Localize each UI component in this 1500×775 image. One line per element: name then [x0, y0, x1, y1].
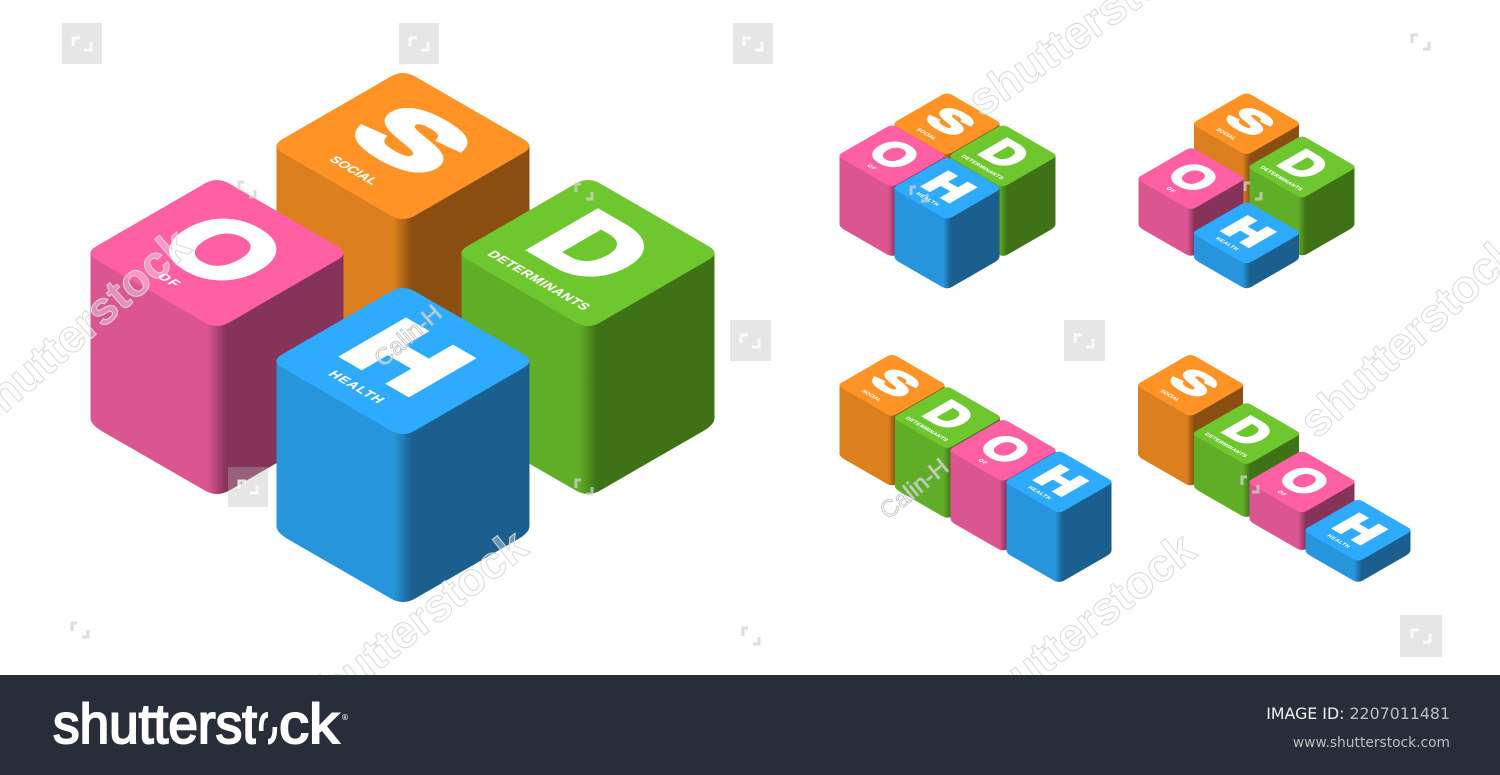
cube H: [895, 158, 999, 288]
cube O: O: [856, 132, 933, 176]
shutterstock logo wordmark: shutterst: [53, 692, 257, 755]
cube O: OF: [1164, 187, 1177, 194]
cube S: S: [1158, 362, 1230, 404]
large cube O: of: [90, 180, 344, 494]
large cube D: determinants: [462, 180, 714, 494]
cube D: DETERMINANTS: [1258, 166, 1304, 192]
image ID text: IMAGE ID: 2207011481: [1266, 704, 1450, 723]
cube H: H: [1024, 460, 1097, 502]
shutterstock logo wordmark: ck: [279, 692, 340, 755]
large cube H: health: [276, 288, 530, 602]
cube D: DETERMINANTS: [904, 416, 949, 443]
cube O: O: [967, 427, 1044, 471]
cube D: DETERMINANTS: [959, 154, 1005, 181]
cube S: S: [860, 362, 931, 404]
cube D: D: [913, 394, 987, 437]
large cube H: health: H: [320, 307, 495, 408]
shutterstock logo wordmark: o: [258, 692, 278, 755]
cube H: HEALTH: [1325, 534, 1351, 549]
cube S: [895, 93, 999, 224]
cube O: OF: [1275, 490, 1288, 497]
cube S: [1194, 93, 1299, 224]
cube O: OF: [976, 458, 989, 466]
cube H: H: [1212, 211, 1285, 253]
cube D: [895, 387, 1000, 518]
shutterstock logo wordmark: ®: [341, 713, 349, 722]
cube O: [840, 125, 944, 256]
cube O: [1250, 452, 1354, 550]
cube O: O: [1266, 459, 1343, 503]
cube H: [1007, 452, 1111, 582]
cube H: HEALTH: [914, 192, 940, 207]
cube O: [1139, 148, 1243, 256]
cube O: [951, 420, 1055, 550]
cube H: HEALTH: [1026, 486, 1052, 501]
cube O: OF: [865, 164, 878, 171]
large cube O: of: OF: [154, 271, 184, 289]
watermark overlay: shutterstock: [287, 519, 537, 730]
cube H: [1194, 203, 1299, 288]
website text: www.shutterstock.com: [1293, 735, 1450, 751]
cube S: SOCIAL: [859, 389, 883, 403]
cube S: [840, 355, 944, 485]
cube D: D: [1212, 410, 1286, 453]
large cube S: social: SOCIAL: [326, 154, 382, 187]
small variant: diagonal row, descending heights: [1138, 355, 1410, 582]
cube H: H: [912, 166, 985, 208]
large cube D: determinants: DETERMINANTS: [484, 248, 594, 312]
large SDOH cube group: [90, 73, 714, 602]
cube S: SOCIAL: [1214, 128, 1238, 141]
cube S: S: [1214, 101, 1286, 142]
large cube S: social: [276, 73, 530, 387]
watermark overlay: shutterstock: [955, 522, 1205, 733]
small variant: diagonal row, equal heights: [840, 355, 1111, 582]
cube S: S: [915, 101, 986, 142]
cube H: [1306, 500, 1410, 582]
watermark overlay: Calin-H: [875, 453, 954, 525]
cube H: H: [1323, 508, 1396, 550]
cube D: [951, 125, 1055, 256]
cube D: [1194, 403, 1299, 517]
small variant: square block, descending heights: [1139, 93, 1354, 288]
small variant: square block, equal heights: [840, 93, 1055, 288]
cube D: DETERMINANTS: [1203, 432, 1249, 459]
cube O: O: [1155, 155, 1232, 199]
cube D: D: [968, 132, 1042, 175]
cube H: HEALTH: [1214, 237, 1240, 252]
watermark overlay: Calin-H: [369, 300, 447, 373]
cube S: SOCIAL: [914, 128, 938, 141]
cube S: [1138, 355, 1243, 485]
cube S: SOCIAL: [1158, 389, 1182, 403]
large cube S: social: S: [326, 90, 498, 189]
cube D: D: [1267, 143, 1341, 186]
large cube O: of: O: [131, 197, 314, 303]
footer banner: [0, 675, 1500, 775]
cube D: [1250, 137, 1354, 255]
large cube D: determinants: D: [504, 196, 682, 299]
large cube H: health: HEALTH: [325, 368, 388, 405]
